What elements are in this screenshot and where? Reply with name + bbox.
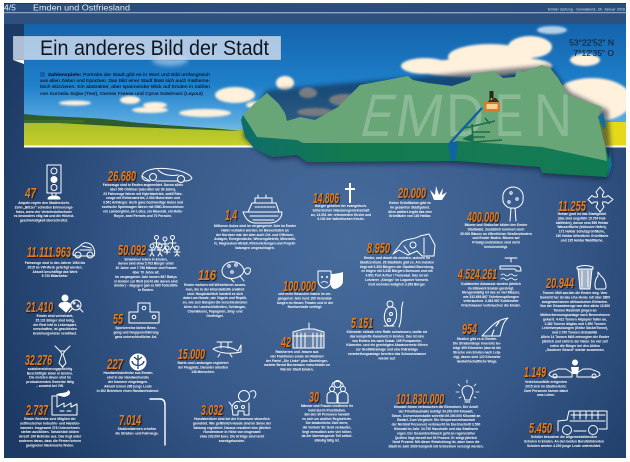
item: 8.950 city district: es folgen mit 3.346 Bürgern Borssum und mit — [361, 269, 434, 273]
item: 26.680 vehicles: exotische Sportwagen fahren mit EMD-Kennzeichen: — [102, 205, 184, 209]
item: 15.000 airport — [177, 342, 241, 374]
item: 227 crafts: in 302 Betrieben einen Handwerksberuf. — [97, 389, 159, 393]
item: 50.092 residents: davon sind etwa 5.703 Bürger unter — [118, 262, 175, 266]
item: 14.806 church: an, 14.001 der reformierten Kirche und — [311, 213, 371, 217]
item: 11.255 area: 150 Hektar öffentliche Grünfläche — [556, 234, 608, 238]
icon: factory — [52, 390, 77, 415]
item: 11.255 area: Hektar groß ist das Stadtgebiet — [558, 212, 607, 216]
item: 101.830.000 electricity: Kilowatt im Jahr. 34.700 Haushalte und das Stadtwerk — [394, 427, 478, 431]
item: 42 council — [264, 323, 330, 372]
item: 100.000 theatre visitors: Nordseehalle verfolgt. — [288, 305, 322, 309]
icon: theatre masks — [318, 271, 343, 289]
item: 1,4 port: Millionen Autos sind im vergangenen Jahr im Emder — [214, 224, 297, 228]
item: 100.000 theatre visitors: 100.000 — [283, 278, 316, 295]
item: 3.032 dogs: gemeldet. Wie gefährlich Hunde sind im Sinne der — [193, 421, 272, 425]
item: 20.000 green spaces — [388, 185, 447, 218]
item: 50.092 residents: in Emden. — [138, 288, 154, 292]
item: 5.151 sewers: Kilometer- und ein gereinigtes Abwassernetz führen — [346, 343, 428, 347]
item: 954 roads: Strecke von Emden nach Leip- — [453, 350, 501, 354]
item: 42 council: vier Fraktionen sowie ein Ratsherr — [270, 354, 325, 358]
item: 47 traffic lights: 47 — [24, 185, 36, 202]
map of Emden: M — [391, 81, 449, 149]
item: 26.680 vehicles — [102, 168, 192, 218]
item: 116 pets: 116 — [198, 267, 216, 284]
item: 47 traffic lights: geschwindigkeit überschreitet. — [20, 219, 68, 223]
item: 3.032 dogs: 3.032 — [201, 402, 223, 419]
item: 42 council: Ratsherren und -frauen aus — [275, 350, 319, 354]
item: 42 council: 42 — [280, 334, 291, 351]
item: 2.737 companies: Emder Betriebe sind Mitglied der — [24, 417, 76, 421]
coordinates — [569, 38, 614, 58]
item: 11.111.963 Beetles: 11.111.963 — [27, 244, 71, 261]
item: 116 pets: Arten der Landschildkröten, Schlangen, — [184, 305, 246, 309]
map of Emden: D — [446, 82, 484, 149]
item: 227 crafts: Aktuell lernen 285 junge Leute — [104, 384, 152, 388]
item: 101.830.000 electricity: der Privathaushalte beträgt 34.200.000 Kilowatt, — [399, 409, 473, 413]
item: 227 crafts: sind in der Handwerksrolle — [107, 376, 149, 380]
item: 26.680 vehicles: Royce, zwei Ferraris und 70 Porsche. — [114, 214, 172, 218]
item: 47 traffic lights: fotos, wenn der Verkehrsteilnehmer — [16, 210, 73, 214]
item: 15.000 airport: 138 Menschen. — [191, 370, 215, 374]
item: 30 prostitution: Männer und Frauen verdienen ihr — [301, 404, 354, 408]
item: 5.450 school pupils: Schulen werden 4.200 junge Leute unterrichtet. — [527, 444, 601, 448]
item: 2.737 companies — [19, 390, 82, 447]
icon: people — [149, 236, 180, 256]
item: 30 prostitution: es sich um amtlich Registrierte. — [302, 417, 352, 421]
icon: tree — [503, 187, 523, 221]
item: 954 roads: landwirtschaftliche Wege. — [457, 360, 497, 364]
item: 100.000 theatre visitors: gangenen Jahr rund 150 Veranstal- — [278, 296, 332, 300]
icon: bin and bag — [577, 266, 606, 289]
icon: necktie — [55, 346, 70, 367]
icon: cross — [345, 183, 355, 203]
item: 4.524.261 waste water: Frischwasser verbrauchen die Emder. — [461, 304, 521, 308]
item: 30 prostitution: die Verkehr für Geld verkaufen, — [303, 426, 351, 430]
item: 400.000 trees: Bäume und Sträucher bilden den Emder — [465, 223, 528, 227]
item: 3.032 dogs: Satzung registriert. Daraus resultiert eine jährlich — [193, 426, 271, 430]
item: 5.151 sewers: 5.151 — [351, 315, 373, 332]
icon: craft emblem — [130, 354, 146, 370]
item: 101.830.000 electricity: eigen. Der Gesamtverbrauch geht an regenerative — [397, 431, 475, 435]
item: 1,4 port: Anlagen, Energiestücke, Wiesengüteteile, Mineralöl- — [214, 237, 296, 241]
item: 227 crafts — [97, 354, 159, 393]
item: 5.450 school pupils: Schulen in Emden. An den beiden Berufsbildenden — [524, 439, 604, 443]
item: 5.151 sewers: von Emden bis nach Dubai. 195 Pumpwerke, — [352, 339, 422, 343]
item: 47 traffic lights: Zehn „Blitzer“ schießen Erinnerungs- — [15, 205, 73, 209]
coordinates: 53°22'52" N — [569, 38, 614, 48]
item: 1.149 accidents: Zwei Personen kamen dabei — [524, 389, 568, 393]
item: 20.944 waste: 1.382 Tonnen Altglas und 1.950 Tonnen — [544, 322, 606, 326]
item: 101.830.000 electricity: Strom. Conversionstudie schreibt 89.300.000 Kilowatt an — [392, 414, 480, 418]
item: 100.000 theatre visitors — [277, 271, 343, 309]
item: 11.255 area: und 135 Hektar Waldfläche. — [561, 238, 603, 242]
item: 11.255 area: Wasserfläche (inklusive Hafen), — [557, 225, 607, 229]
item: 20.944 waste: reden die Bürger bei den Aktion — [550, 344, 600, 348]
item: 3.032 dogs: zweckgebunden. — [219, 439, 245, 443]
item: 101.830.000 electricity: Bedarf. Zum Vergleich: Ein Vierpersonenhaushalt — [397, 418, 476, 422]
item: 2.737 companies: ostfriesischen Industrie- und Handels- — [20, 421, 80, 425]
item: 101.830.000 electricity: Stadt im Jahr 2030 komplett mit Grünstrom versorgt werden. — [388, 445, 484, 449]
item: 954 roads: Straßen gibt es in Emden. — [457, 337, 497, 341]
item: 20.944 waste: jährlich und sieht in der Natur. So viel zeit — [541, 339, 609, 343]
item: 20.000 green spaces: Kleine Grünflächen gibt es — [389, 201, 431, 205]
item: 116 pets: men, die in der Artenstatistik erwähnt — [186, 287, 245, 291]
item: 50.092 residents: 50.092 — [118, 242, 146, 259]
item: 47 traffic lights: Ampeln regeln den Stadtverkehr. — [18, 201, 70, 205]
item: 100.000 theatre visitors: und mehr Besucher haben im ver- — [278, 292, 332, 296]
item: 32.276 employees: 32.276 — [25, 352, 52, 369]
item: 954 roads: trägt 499 Kilometer (das ist die — [453, 346, 501, 350]
icon: cruise ship — [243, 195, 282, 223]
item: 5.450 school pupils — [524, 411, 607, 448]
icon: group of people — [327, 380, 348, 403]
item: 55 sports clubs: 55 — [113, 311, 123, 328]
icon: sports car — [142, 168, 192, 182]
item: 30 prostitution: ständig tätig ist. — [314, 438, 340, 442]
item: 1.149 accidents: Verkehrsunfälle ereigneten — [525, 380, 567, 384]
icon: water tap — [500, 258, 521, 280]
item: 32.276 employees: Beschäftigte leben in Emden. — [27, 371, 73, 375]
item: 400.000 trees: 400.000 — [466, 209, 499, 226]
item: 20.944 waste: Tonnen Müll wurden die Emder weg. Vom — [543, 291, 607, 295]
item: 55 sports clubs: gung und Gruppenerfahrung — [113, 330, 159, 334]
item: 400.000 trees: berücksichtigt. — [484, 245, 508, 249]
item: 20.944 waste: Gewicht her ist das eine Herde mit über 3800 — [540, 295, 610, 299]
item: 32.276 employees — [25, 346, 74, 388]
item: 7.014 street lights: die Straßen- und Fahrwege. — [115, 431, 159, 435]
item: 3.032 dogs: Hundebesitzer sind bei der Kommune steuerlich — [194, 417, 270, 421]
item: 50.092 residents: in Emden zur Welt (nicht alle davon sind — [114, 279, 178, 283]
item: 116 pets — [183, 262, 251, 318]
icon: podium — [129, 303, 159, 323]
item: 20.000 green spaces: Alles addiert ergibt das eine — [388, 210, 432, 214]
item: 400.000 trees: und Emder Boden. Bäume auf — [472, 236, 520, 240]
item: 3.032 dogs: Hundesteuer in Höhe von insgesamt — [203, 430, 261, 434]
intro text — [40, 72, 211, 96]
item: 8.950 city district: 4.851 Port Arthur / Transvaal. Das ist ein — [366, 274, 428, 278]
item: 3.032 dogs: etwa 233.000 Euro. Die Erträge sind nicht — [200, 435, 265, 439]
item: 21.410 married: der Rest lebt in Lebenspart- — [33, 323, 77, 327]
item: 1.149 accidents: 2015 sich im Stadtverkehr. — [525, 384, 567, 388]
icon: figure in crash — [571, 360, 579, 374]
item: 5.450 school pupils: Schüler besuchen die Allgemeinbildenden — [531, 435, 597, 439]
item: 15.000 airport: der Flugplatz. Darunter arbeiten — [178, 365, 228, 369]
item: 30 prostitution: Die tatsächliche Zahl derer, — [306, 421, 348, 425]
item: 14.806 church: 14.806 — [313, 190, 339, 207]
icon: town house — [484, 91, 500, 112]
item: 1.149 accidents: 1.149 — [524, 364, 546, 381]
item: 15.000 airport: 15.000 — [178, 346, 205, 363]
item: 20.944 waste: „Sauberer Strand“ wieder zusammen. — [545, 348, 605, 352]
item: 2.737 companies: kammer. Insgesamt 378 Unternehmen — [20, 426, 80, 430]
item: 5.151 sewers: Kilometer müsste eine Ratte schwimmen, wollte sie — [347, 330, 428, 334]
item: 30 prostitution: Geld durch Prostitution. — [308, 408, 346, 412]
header band: 4/5 — [4, 2, 16, 12]
item: 5.151 sewers: das komplette Kanalnetz in Emden. Das ist eine — [350, 334, 424, 338]
item: 400.000 trees: Privatgrundstücken sind nicht — [472, 241, 521, 245]
item: 20.944 waste: und 2.700 Tonnen Grünabfall. — [552, 331, 598, 335]
map of Emden — [241, 65, 612, 180]
item: 11.111.963 Beetles: Aktuell beschäftigt das Werk — [32, 270, 78, 274]
item: 20.000 green spaces: 20.000 — [397, 185, 426, 202]
item: 55 sports clubs: Sportvereine bieten Bewe- — [115, 326, 157, 330]
icon: town hall — [293, 323, 324, 348]
item: 227 crafts: der Kammer eingetragen. — [108, 380, 148, 384]
item: 50.092 residents: Einwohner leben in Emden, — [124, 257, 168, 261]
intro text: tisch skizzieren. Ein abstrakter, aber spannender Blick auf Emden in Zahlen — [40, 84, 210, 89]
item: 42 council: der Partei „Die Linke“ plus Oberbürger- — [266, 359, 328, 363]
item: 116 pets: Greifvögel. — [206, 314, 224, 318]
header band — [4, 2, 626, 24]
icon: dog — [229, 390, 256, 415]
item: 26.680 vehicles: zeuge mit Elektroantrieb, 2.084 Motorräder und — [106, 196, 180, 200]
item: 14.806 church: lutherischen Glaubensgemeinschaft — [313, 208, 370, 212]
item: 4.524.261 waste water: Kubikmeter Abwasser werden jährlich — [461, 282, 521, 286]
item: 11.255 area: 171 Hektar Schutzgrünfläche, — [559, 230, 605, 234]
item: 101.830.000 electricity: 101.830.000 — [396, 391, 444, 408]
item: 26.680 vehicles: 26.680 — [107, 168, 136, 185]
item: 8.950 city district: 8.950 — [367, 240, 390, 257]
item: 1.149 accidents — [524, 360, 600, 397]
item: 116 pets: dabei um Hunde, wie Vögeln und Reptili- — [183, 296, 247, 300]
item: 5.151 sewers: zur Großkläranlage und eine Kläranlage — [356, 348, 418, 352]
item: 20.000 green spaces: Grünfläche von 130 Hektar. — [389, 214, 431, 218]
item: 30 prostitution: Bei den 30 Personen handelt — [304, 413, 350, 417]
item: 50.092 residents: Im vergangenen Jahr kamen 687 Babys — [115, 275, 177, 279]
item: 21.410 married: 25.131 Bürger sind ledig, — [35, 318, 75, 322]
item: 21.410 married: 21.410 — [25, 299, 53, 316]
icon: light bulb — [456, 380, 479, 402]
map of Emden: E — [355, 82, 403, 149]
item: 42 council: Rat der Stadt Emden. — [280, 368, 314, 372]
item: 954 roads: zig), davon sind 122 Kilometer — [453, 355, 501, 359]
item: 954 roads — [453, 318, 508, 364]
icon: street lamp — [150, 399, 165, 445]
item: 101.830.000 electricity: Kilowatt Strom verbrauchen die Einwohner. Der Anteil — [394, 405, 478, 409]
icon: compass arrows — [588, 187, 613, 212]
item: 42 council: meister Bernd Bornemann entscheiden im — [264, 363, 330, 367]
item: 7.014 street lights — [115, 399, 165, 445]
intro text: aus allen Zeiten und Epochen. Das Bild einer Stadt lässt sich auch mathema- — [40, 78, 211, 83]
item: 20.944 waste: Von der Gesamtmenge war dies allein 13.500 — [540, 304, 610, 308]
item: 1,4 port: fe, Magnesium-Metall, Röhrenleitungen und Projekt- — [214, 242, 296, 246]
item: 21.410 married: Emder sind verheiratet, — [37, 314, 73, 318]
item: 50.092 residents: über 70 Jahre alt. — [132, 270, 160, 274]
icon: off-road bus with pupils — [558, 411, 607, 434]
item: 26.680 vehicles: 3.541 Anhänger. Auch ganz hochwertige Autos und — [103, 201, 183, 205]
item: 21.410 married: nerschaften, ist geschieden — [33, 327, 77, 331]
item: 8.950 city district: liegt mit 3.353 Bürgern der Stadtteil Barenburg, — [360, 265, 434, 269]
item: 4.524.261 waste water — [457, 258, 521, 308]
icon: townscape — [393, 234, 435, 256]
item: 101.830.000 electricity — [388, 380, 484, 449]
icon: car crash — [549, 369, 600, 378]
icon: turtle — [222, 262, 251, 282]
item: 2.737 companies: derzeit 199 Betriebe aus. Das liegt unter — [19, 435, 82, 439]
item: 11.111.963 Beetles: 2015 im VW-Werk gefertigt worden. — [27, 265, 83, 269]
item: 30 prostitution — [301, 380, 354, 442]
item: 11.111.963 Beetles: Fahrzeuge sind in den Jahren 1964 bis — [25, 261, 85, 265]
item: 4.524.261 waste water: verbrauchen. 2.453.987 Kubikmeter — [463, 299, 519, 303]
header band: Emder Zeitung · Sonnabend, 30. Januar 2016 — [548, 8, 625, 12]
photo: sky, clouds and field — [24, 24, 630, 146]
item: 55 sports clubs: ganz unterschiedlicher Art. — [115, 335, 157, 339]
item: 47 traffic lights: es besonders eilig hat und die Höchst- — [14, 214, 74, 218]
item: 8.950 city district: Emder, und damit die meisten, wohnen im — [364, 256, 430, 260]
item: 227 crafts: Handwerksbetriebe aus Emden — [104, 371, 152, 375]
item: 3.032 dogs — [193, 390, 272, 443]
item: 20.944 waste: 20.944 — [545, 275, 574, 292]
item: 26.680 vehicles: 23 Fahrzeuge fahren mit Hybridantrieb, zwölf Fahr- — [103, 192, 183, 196]
item: 7.014 street lights: Straßenlaternen erhellen — [118, 427, 156, 431]
item: 11.111.963 Beetles — [25, 243, 95, 278]
item: 5.450 school pupils: 5.450 — [529, 420, 552, 437]
item: 50.092 residents — [114, 236, 180, 292]
icon: couple — [59, 295, 83, 312]
item: 30 prostitution: da der überwiegende Teil selbst- — [302, 434, 352, 438]
item: 227 crafts: 227 — [106, 356, 123, 373]
item: 8.950 city district — [360, 234, 435, 286]
item: 50.092 residents: 20 Jahre und 7.758 Männer und Frauen — [115, 266, 177, 270]
map of Emden: E — [495, 82, 523, 149]
item: 4.524.261 waste water: Mengenmäßig ist das so viel Wasser, — [462, 291, 520, 295]
item: 2.737 companies: stellen aus/bilden. Tatsächlich bilden — [21, 430, 79, 434]
item: 1,4 port: 1,4 — [225, 207, 237, 224]
item: 5.151 sewers: verarbeitungsanlage bereiten das Schmutzwasser — [348, 352, 427, 356]
item: 30 prostitution: 30 — [309, 389, 319, 406]
photo white border — [24, 146, 626, 148]
icon: grass — [430, 186, 447, 200]
item: 101.830.000 electricity: Nord Prozent. Mit dieser Entwicklung ist, dann kann die — [392, 440, 480, 444]
item: 116 pets: Emder wohnen mit Wirbeltieren zusam- — [184, 283, 246, 287]
item: 26.680 vehicles: ein Lamborghini, ein Lotus, ein Maserati, ein Rolls- — [103, 209, 183, 213]
icon: traffic light — [47, 165, 61, 199]
item: 26.680 vehicles: über 500 Oldtimer (also älter als 30 Jahre), — [110, 187, 176, 191]
header band: Emden und Ostfriesland — [33, 2, 130, 12]
item: 32.276 employees: Die meisten davon sind im — [29, 376, 71, 380]
item: 30 prostitution: liegt vermutlich sehr viel höher, — [302, 430, 352, 434]
item: 954 roads: 954 — [462, 321, 477, 338]
item: 400.000 trees: 25.000 Bäume an öffentlichen Straßenrändern — [460, 232, 532, 236]
item: 32.276 employees: sozialversicherungspflichtig — [28, 367, 72, 371]
item: 11.111.963 Beetles: 9.723 Mitarbeiter. — [42, 274, 68, 278]
item: 11.255 area: 11.255 — [558, 198, 586, 215]
item: 1.149 accidents: ums Leben. — [537, 393, 555, 397]
coordinates: 7°12'35" O — [573, 48, 614, 58]
item: 47 traffic lights — [14, 165, 74, 223]
item: 1,4 port: ladungen umgeschlagen. — [235, 246, 275, 250]
item: 11.255 area — [556, 187, 613, 242]
item: 14.806 church — [311, 183, 371, 221]
item: 116 pets: en, wie zum Beispiel die verschiedensten — [183, 301, 247, 305]
item: 20.944 waste: gekarrt. 4.412 Tonnen Altpapier fallen an, — [543, 317, 607, 321]
item: 20.000 green spaces: im gesamten Stadtgebiet. — [390, 205, 430, 209]
item: 4.524.261 waste water: im Klärwerk Emden gereinigt. — [468, 286, 514, 290]
item: 2.737 companies: anderem daran, dass die Firmen keinen — [19, 439, 81, 443]
title banner: Ein anderes Bild der Stadt — [40, 37, 269, 60]
item: 100.000 theatre visitors: tungen im Neuen Theater und in der — [277, 301, 334, 305]
item: 101.830.000 electricity: der Nichtraf Personen) verbraucht im Durchschnitt 3.500 — [392, 423, 480, 427]
intro text: Zahlenspiele: Portraits der Stadt gibt es in Wort und Bild umfangreich — [48, 72, 210, 77]
item: 21.410 married: beziehungsweise verwitwet. — [33, 332, 77, 336]
item: 7.014 street lights: 7.014 — [119, 412, 141, 429]
item: 20.944 waste: Allein 14 Tonnen Müll entsorgten die Emder — [541, 335, 610, 339]
item: 1,4 port — [214, 195, 297, 250]
item: 20.944 waste: ausgewachsenen afrikanischen Elefanten. — [542, 300, 608, 304]
item: 400.000 trees — [460, 187, 532, 249]
item: 14.806 church: Bürger gehören der evangelisch- — [315, 204, 367, 208]
item: 116 pets: sind. Hauptsächlich handelt es sich — [187, 292, 243, 296]
item: 11.255 area: (das sind ungefähr 15.754 Fuß- — [558, 216, 606, 220]
item: 4.524.261 waste water: wie 332.695.867 Toilettenspülungen — [462, 295, 519, 299]
item: 5.151 sewers — [346, 301, 428, 360]
item: 2.737 companies: 2.737 — [25, 402, 48, 419]
item: 20.944 waste — [540, 266, 610, 352]
item: 55 sports clubs — [113, 303, 159, 339]
item: 11.255 area: ballfelder), davon sind 859 Hektar — [556, 221, 609, 225]
item: 400.000 trees: Stadtwald. Zusätzlich kommen noch — [468, 227, 524, 231]
icon: VW Beetle — [73, 243, 95, 258]
item: 4.524.261 waste water: 4.524.261 — [457, 266, 497, 283]
item: 32.276 employees: – zumeist bei VW. — [36, 384, 64, 388]
item: 21.410 married — [25, 295, 83, 336]
item: 50.092 residents: Emder) – dagegen gab es 689 Todesfälle — [114, 284, 178, 288]
item: 20.944 waste: Leichtverpackungen (Gelbe Säcke/Tonne), — [542, 326, 608, 330]
item: 8.950 city district: Letzterer „Königs“ im Logumer Vorwerk. — [365, 278, 429, 282]
item: 8.950 city district: Stadtzentrum. 26 Stadtteile gibt es. Am meisten — [360, 260, 434, 264]
item: 14.806 church: 4.102 der katholischen Kirche. — [317, 217, 365, 221]
item: 116 pets: Chamäleons, Papageien, Sing- und — [188, 309, 242, 313]
icon: biplane — [213, 342, 241, 357]
item: 26.680 vehicles: Fahrzeuge sind in Emden angemeldet. Davon allein — [103, 183, 183, 187]
icon: road — [482, 318, 508, 336]
item: 5.151 sewers: wieder auf. — [377, 356, 396, 360]
item: 32.276 employees: produzierenden Gewerbe tätig — [26, 380, 74, 384]
item: 15.000 airport: Starts und Landungen registriert — [177, 361, 230, 365]
item: 8.950 city district: Dort wohnten lediglich 3.353 Bürger. — [368, 282, 426, 286]
item: 1,4 port: der Nordsee war der aber auch Ort- und Offshore- — [216, 233, 294, 237]
icon: rat — [384, 301, 403, 327]
item: 20.944 waste: Müllverbrennungsanlage nach Bremerhaven — [540, 313, 610, 317]
item: 101.830.000 electricity: Quellen liegt derzeit bei 93 Prozent. Er steigt jährlich — [395, 436, 477, 440]
map of Emden: N — [534, 82, 572, 149]
item: 1,4 port: Hafen verladen worden. Im Binnenhafen an — [221, 228, 289, 232]
item: 20.944 waste: Tonnen Restmüll gingen an — [554, 309, 596, 313]
intro text: von Kornelia Sojka (Text), Dennis Freese und Cyrus Soleimani (Layout) — [40, 91, 204, 96]
item: 2.737 companies: geeigneten Nachwuchs finden. — [26, 443, 74, 447]
item: 954 roads: Die Straßenlänge innerorts be- — [453, 342, 501, 346]
